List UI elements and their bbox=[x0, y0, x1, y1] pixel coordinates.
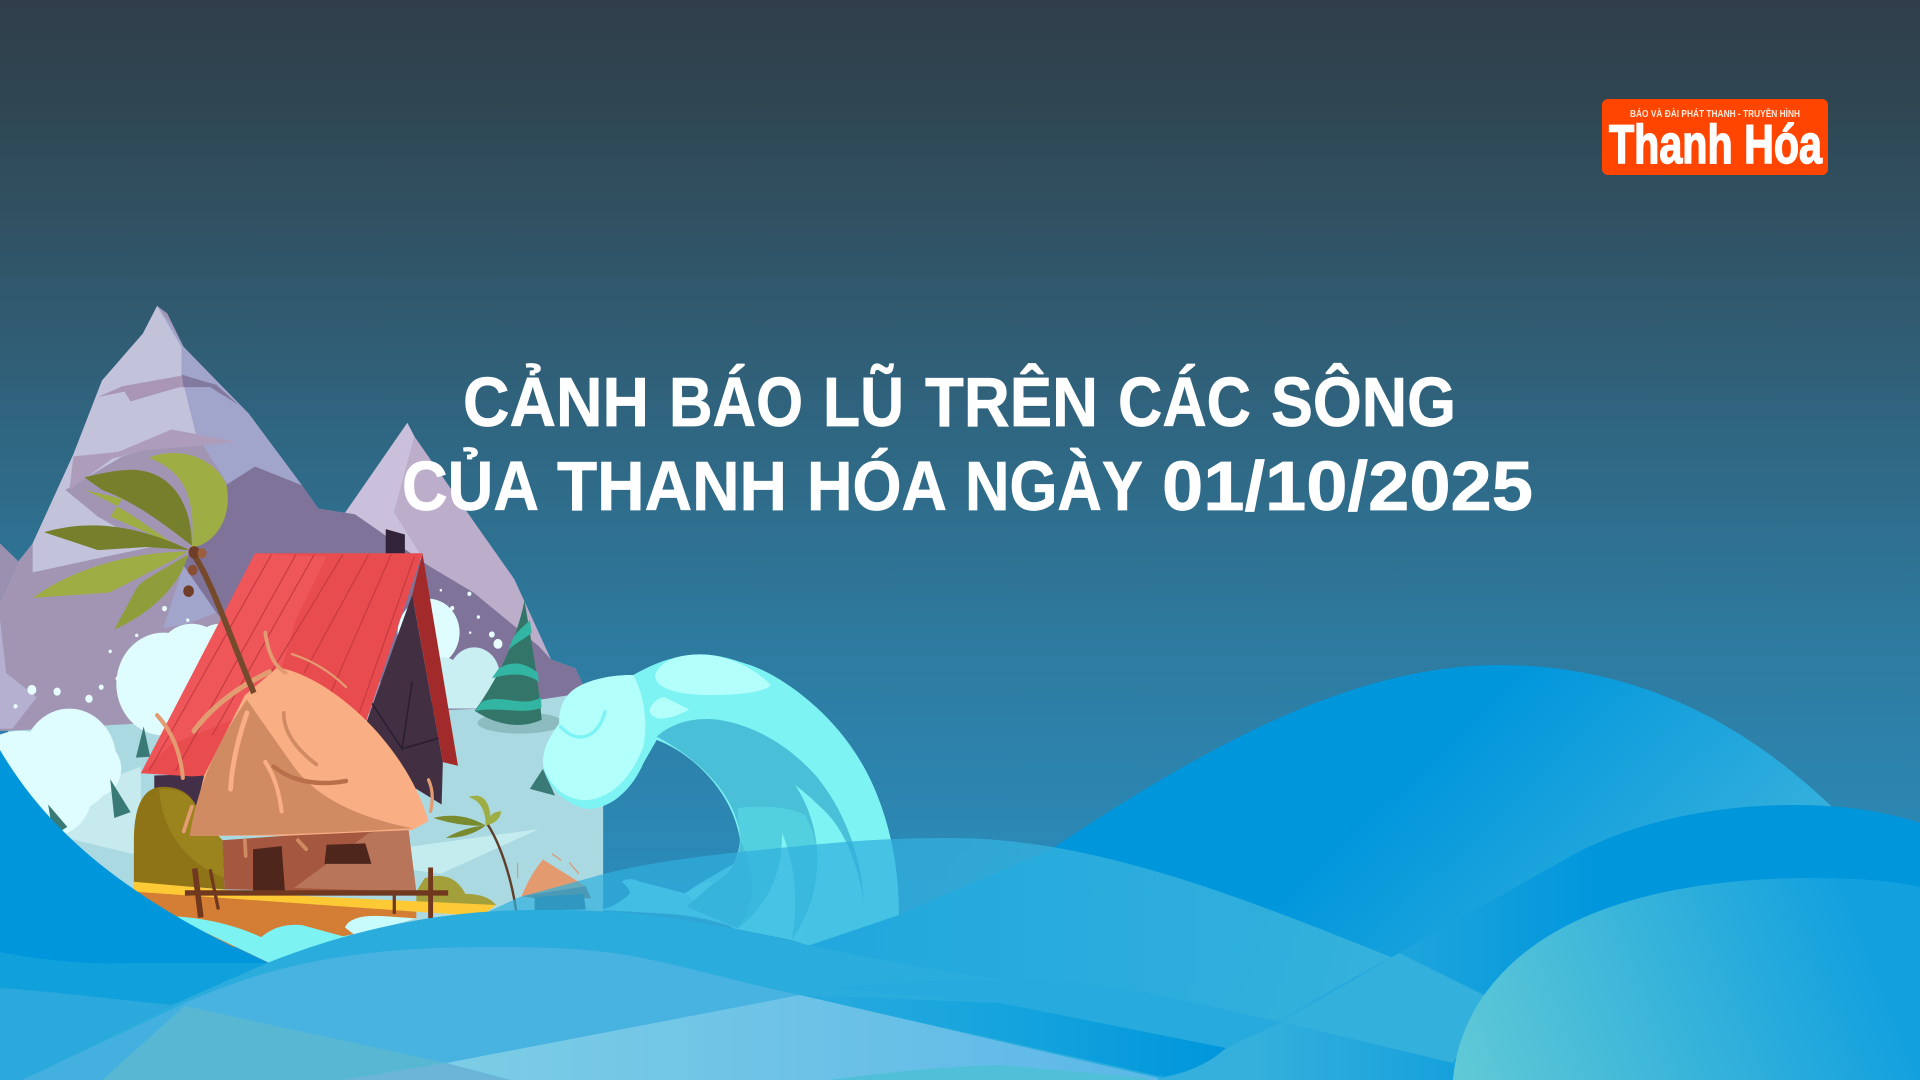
title line 2: HÓA bbox=[807, 447, 947, 525]
right blue band wave bbox=[1158, 805, 1920, 1080]
mountain upper stratum bbox=[98, 376, 184, 402]
roof seams bbox=[149, 555, 414, 771]
lower left pale wave bbox=[102, 1006, 510, 1080]
dark leaf bbox=[84, 470, 192, 546]
title line 1: CÁC bbox=[1118, 363, 1251, 441]
wave water foot bbox=[600, 860, 833, 940]
hut wall bbox=[222, 827, 416, 893]
title line 1: CẢNH bbox=[463, 363, 649, 441]
front hump wave bbox=[22, 910, 1226, 1080]
bottom left wave bbox=[0, 988, 172, 1080]
main mountain bbox=[0, 306, 449, 731]
wave inner shade bbox=[657, 719, 864, 940]
wave head bbox=[543, 675, 645, 800]
pale water near left cloud bbox=[66, 766, 141, 854]
title line 2: 01/10/2025 bbox=[1162, 447, 1533, 525]
title line 2: THANH bbox=[557, 447, 787, 525]
wooden jetty bbox=[185, 868, 448, 918]
lower leaf bbox=[114, 555, 188, 630]
hut window bbox=[324, 843, 371, 864]
illustration: flooded village bbox=[0, 306, 603, 963]
thatch roof bbox=[190, 668, 429, 836]
lower light leaf bbox=[33, 551, 188, 598]
foam cloud right back bbox=[398, 599, 460, 667]
gable timber bbox=[369, 682, 441, 749]
foam cloud middle bbox=[116, 624, 218, 736]
light leaf bbox=[84, 490, 190, 550]
foam cloud right front bbox=[420, 647, 500, 709]
title bbox=[402, 362, 1533, 525]
left dark leaf bbox=[44, 525, 190, 550]
teal tree bbox=[475, 601, 542, 725]
mountain shaded face bbox=[157, 306, 302, 485]
foam at shore bbox=[171, 916, 429, 963]
small far mountain bbox=[0, 543, 18, 601]
coconuts bbox=[183, 546, 207, 597]
yellow ground strip bbox=[134, 882, 496, 916]
wave outer body bbox=[543, 654, 899, 946]
dark streak wave bbox=[800, 995, 1226, 1076]
translucent wave overlap right bbox=[1282, 953, 1490, 1063]
thatch shaded side bbox=[190, 700, 412, 836]
logo: Thanh Hóa bbox=[1602, 99, 1828, 175]
logo plate bbox=[1602, 99, 1828, 175]
title line 1: TRÊN bbox=[925, 362, 1098, 441]
left band below corner wave bbox=[0, 952, 267, 1005]
title line 2: CỦA bbox=[402, 446, 539, 525]
wave inner light bbox=[737, 807, 817, 940]
bottom purple sliver bbox=[344, 1063, 510, 1080]
wave crest highlight bbox=[655, 654, 771, 695]
pale flood water bbox=[0, 693, 603, 927]
red house bbox=[141, 529, 458, 816]
title line 2: NGÀY bbox=[965, 447, 1143, 525]
back bush right bbox=[416, 876, 496, 905]
top light leaf bbox=[149, 453, 228, 548]
coconut palm bbox=[33, 453, 254, 693]
thatched hut bbox=[157, 633, 432, 893]
head swirl bbox=[561, 712, 605, 737]
right mountain bbox=[345, 422, 583, 710]
trunk bbox=[195, 557, 254, 693]
left corner wave bbox=[0, 750, 267, 1080]
title line 1 bbox=[463, 362, 1456, 441]
mountain darker stratum on shade bbox=[182, 375, 239, 405]
back ocean wave right bbox=[808, 665, 1920, 1080]
chimney bbox=[386, 529, 405, 555]
thatch straw bbox=[157, 633, 432, 856]
spray droplets bbox=[13, 589, 502, 709]
logo name: Thanh Hóa bbox=[1609, 113, 1822, 175]
translucent middle wave bbox=[470, 838, 1490, 1063]
olive bush bbox=[134, 787, 224, 889]
orange ground bbox=[134, 892, 416, 950]
title line 1: LŨ bbox=[823, 363, 904, 441]
mountain dark slope bbox=[184, 467, 449, 682]
gable wall bbox=[366, 595, 443, 804]
mountain middle stratum bbox=[69, 430, 236, 490]
roof trim bbox=[412, 553, 458, 766]
small pine trees bbox=[48, 726, 555, 836]
hut door bbox=[253, 846, 285, 891]
logo tagline: BÁO VÀ ĐÀI PHÁT THANH - TRUYỀN HÌNH bbox=[1630, 107, 1800, 120]
title line 1: SÔNG bbox=[1271, 362, 1456, 441]
title line 1: BÁO bbox=[669, 363, 803, 441]
second hump wave bbox=[102, 947, 800, 1080]
giant curling wave bbox=[543, 654, 899, 946]
roof bbox=[141, 553, 422, 776]
mountain light face bbox=[33, 306, 196, 572]
roof highlight bbox=[141, 553, 327, 773]
lighter water streak bbox=[408, 829, 539, 874]
pale foreground wave bbox=[446, 995, 1158, 1080]
wall under roof bbox=[154, 775, 204, 806]
faint band under hump bbox=[833, 980, 1282, 1048]
teal tree shadow bbox=[478, 714, 560, 734]
small foam highlight bbox=[650, 697, 689, 718]
corner light wave bbox=[22, 1003, 185, 1080]
small flooded hut bbox=[518, 854, 591, 910]
foam cloud left bbox=[0, 709, 121, 836]
right front wave bbox=[1453, 878, 1920, 1080]
mountain lower pale slope bbox=[163, 566, 216, 628]
bottom teal sliver bbox=[829, 1065, 1147, 1080]
title line 2 bbox=[402, 446, 1533, 525]
small palm bbox=[433, 796, 516, 912]
